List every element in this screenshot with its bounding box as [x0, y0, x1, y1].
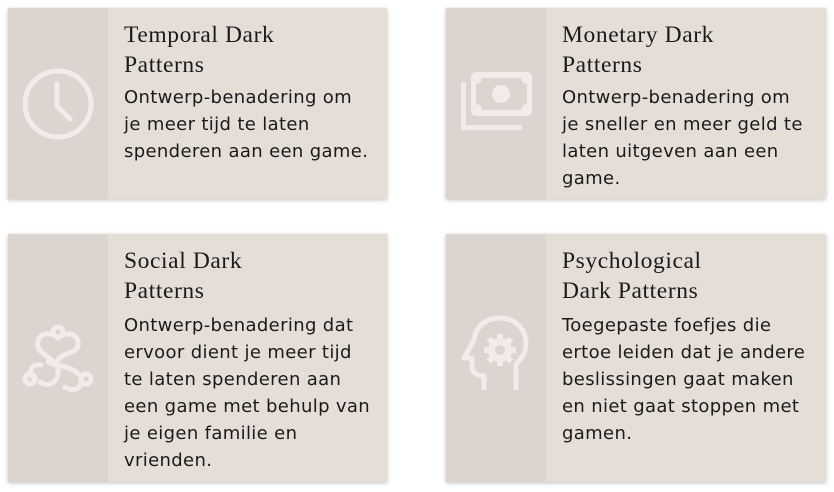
text: monetary: laten uitgeven aan een: [562, 141, 779, 162]
text: monetary: [562, 87, 803, 189]
text: monetary: Ontwerp-benadering om: [562, 87, 790, 108]
text: psychological: beslissingen gaat maken: [562, 369, 794, 390]
heading: social: [124, 248, 242, 304]
heading: psychological: Psychological: [562, 248, 702, 274]
text: social: een game met behulp van: [124, 396, 370, 417]
text: monetary: game.: [562, 168, 621, 189]
text: monetary: je sneller en meer geld te: [562, 114, 803, 135]
text: temporal: spenderen aan een game.: [124, 141, 368, 162]
panel: temporal: [8, 8, 387, 199]
text: temporal: Ontwerp-benadering om: [124, 87, 352, 108]
heading: social: Patterns: [124, 278, 205, 304]
panel: psychological: [446, 234, 826, 482]
heading: temporal: Temporal Dark: [124, 22, 274, 48]
heading: temporal: Patterns: [124, 52, 205, 78]
text: social: je eigen familie en: [124, 423, 297, 444]
icon: social: [8, 234, 108, 482]
text: temporal: je meer tijd te laten: [124, 114, 310, 135]
heading: social: Social Dark: [124, 248, 242, 274]
heading: monetary: Patterns: [562, 52, 643, 78]
text: social: ervoor dient je meer tijd: [124, 342, 352, 363]
text: psychological: en niet gaat stoppen met: [562, 396, 799, 417]
text: psychological: gamen.: [562, 423, 632, 444]
heading: temporal: [124, 22, 274, 78]
text: social: vrienden.: [124, 450, 212, 471]
panel: social: [8, 234, 387, 482]
heading: monetary: Monetary Dark: [562, 22, 714, 48]
text: psychological: ertoe leiden dat je andere: [562, 342, 805, 363]
text: social: te laten spenderen aan: [124, 369, 341, 390]
heading: psychological: Dark Patterns: [562, 278, 698, 304]
text: temporal: [124, 87, 368, 162]
icon: money: [446, 8, 546, 199]
text: psychological: Toegepaste foefjes die: [562, 315, 771, 336]
heading: psychological: [562, 248, 702, 304]
icon: clock: [8, 8, 108, 199]
panel: monetary: [446, 8, 826, 199]
text: social: [124, 315, 370, 471]
icon: head with gear: [446, 234, 546, 482]
text: psychological: [562, 315, 805, 444]
heading: monetary: [562, 22, 714, 78]
text: social: Ontwerp-benadering dat: [124, 315, 353, 336]
